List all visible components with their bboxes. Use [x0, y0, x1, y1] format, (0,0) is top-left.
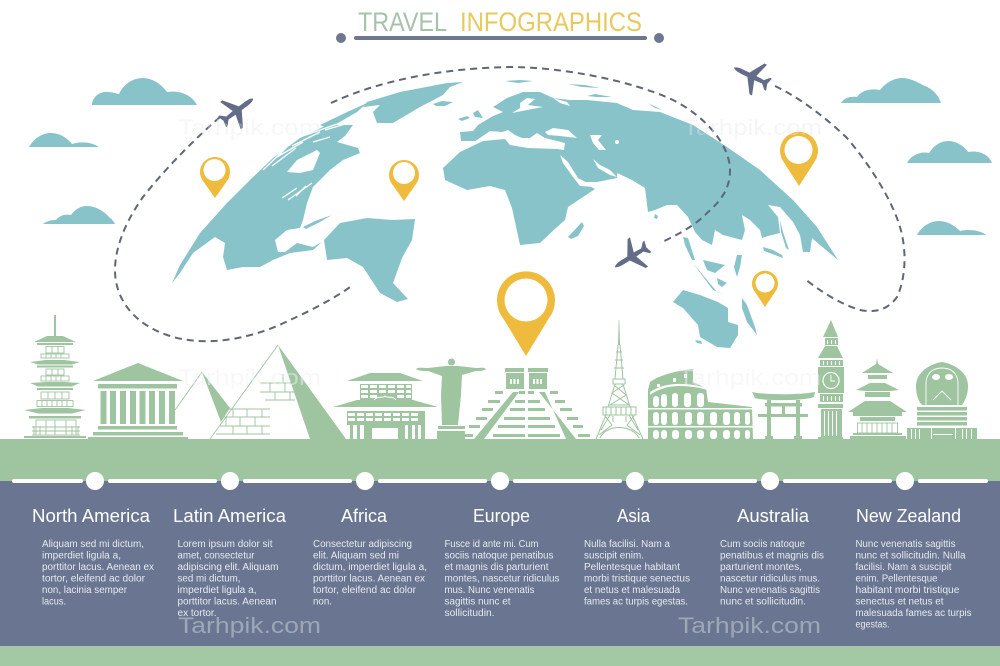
mediterranean	[452, 130, 565, 150]
column: North America	[32, 506, 154, 608]
column: Africa: elit. Aliquam sed mi	[313, 550, 399, 562]
column: Africa: porttitor lacus. Aenean ex	[313, 574, 425, 584]
sea cut-outs	[452, 98, 619, 187]
column: New Zealand: enim. Pellentesque	[856, 574, 938, 584]
column: Africa: Consectetur adipiscing	[313, 539, 412, 550]
watermarks	[178, 115, 822, 638]
column: Europe: Fusce id ante mi. Cum	[444, 539, 538, 550]
column: Europe: mus. Nunc venenatis	[444, 585, 534, 596]
watermarks: Tarhpik.com	[178, 115, 321, 140]
column: Asia: et netus et malesuada	[584, 585, 680, 596]
column: Australia	[720, 506, 824, 608]
baltic sea	[512, 98, 543, 113]
column: Africa: dictum, imperdiet ligula a,	[313, 562, 427, 573]
landmark: asian palace	[333, 373, 438, 439]
column: Latin America	[173, 506, 287, 619]
column: Africa: non.	[313, 596, 332, 608]
japan	[763, 247, 783, 258]
sulawesi	[717, 278, 727, 287]
bottom band	[0, 646, 1000, 666]
column: Australia: Cum sociis natoque	[720, 539, 805, 550]
column: Latin America: ex tortor.	[178, 608, 216, 619]
column: Australia: nunc et sollicitudin.	[720, 596, 806, 608]
title: INFOGRAPHICS	[460, 7, 642, 37]
landmark: mayan pyramid	[464, 368, 590, 439]
column: Asia: suscipit enim.	[584, 550, 644, 562]
column: Europe: sagittis nunc et	[444, 596, 511, 608]
watermarks: Tarhpik.com	[678, 613, 821, 638]
iceland	[433, 101, 453, 106]
column: Latin America: adipiscing elit. Aliquam	[178, 562, 278, 573]
landmark: pagoda	[24, 315, 86, 438]
column: Europe: Europe	[473, 506, 530, 526]
column: Europe: montes, nascetur ridiculus	[444, 574, 560, 584]
caspian sea	[590, 135, 606, 150]
column: Australia: penatibus et magnis dis	[720, 550, 824, 562]
red sea and gulf of aden	[560, 155, 595, 187]
column: New Zealand: senectus et netus et	[856, 596, 944, 608]
column: Latin America: amet, consectetur	[178, 550, 255, 562]
arctic and lake cut-outs	[263, 122, 352, 200]
greenland	[363, 82, 463, 123]
cuba	[303, 215, 332, 229]
column: Latin America: Latin America	[173, 506, 287, 526]
column: Europe	[444, 506, 560, 619]
landmarks skyline	[24, 315, 977, 440]
column: Europe: et magnis dis parturient	[444, 562, 549, 573]
column: Latin America: imperdiet ligula a,	[178, 585, 256, 596]
landmark: big ben	[818, 320, 844, 439]
column: Australia: parturient montes,	[720, 562, 802, 573]
column: Latin America: Lorem ipsum dolor sit	[178, 539, 273, 550]
column: North America: non, lacinia semper	[42, 585, 128, 596]
world map	[172, 80, 838, 348]
canadian arctic islands	[320, 103, 367, 128]
arctic islands	[505, 80, 662, 110]
column: Asia: fames ac turpis egestas.	[584, 596, 688, 608]
pin: north america	[200, 157, 230, 198]
watermarks: Tarhpik.com	[178, 613, 321, 638]
watermarks: Tarhpik.com	[683, 115, 822, 140]
column: New Zealand: nunc et sollicitudin. Nulla	[856, 550, 966, 562]
info panel background	[0, 481, 1000, 646]
white sea	[553, 98, 570, 106]
persian gulf	[593, 159, 617, 177]
column: New Zealand: New Zealand	[856, 506, 961, 526]
column: Asia	[584, 506, 690, 608]
afro-eurasia	[443, 92, 838, 260]
pin: central large	[497, 271, 555, 356]
new guinea	[742, 298, 757, 335]
landmark: pyramids of giza	[175, 345, 346, 439]
java arc	[693, 263, 725, 295]
pin: atlantic	[389, 160, 419, 201]
column: Asia: Pellentesque habitant	[584, 562, 680, 573]
airplane 1	[212, 85, 263, 136]
landmark: torii gate	[752, 392, 815, 439]
watermarks: Tarhpik.com	[178, 365, 321, 390]
ground band	[0, 439, 1000, 481]
flight paths	[115, 67, 905, 341]
column: North America: porttitor lacus. Aenean ex	[42, 562, 154, 573]
airplane 3	[606, 232, 657, 282]
column: Australia: Nunc venenatis sagittis	[720, 585, 820, 596]
column: North America: North America	[32, 506, 151, 526]
map pins	[200, 132, 818, 356]
column: North America: lacus.	[42, 596, 66, 608]
australia	[673, 290, 738, 348]
column: North America: tortor, eleifend ac dolor	[42, 574, 146, 584]
column: North America: imperdiet ligula a,	[42, 550, 121, 562]
column: Africa: tortor, eleifend ac dolor	[313, 585, 417, 596]
borneo	[703, 260, 725, 273]
landmark: sphinx	[907, 362, 977, 439]
north america	[172, 125, 360, 283]
title: TRAVEL	[358, 7, 447, 37]
timeline	[12, 472, 988, 490]
pin: pacific	[752, 271, 778, 307]
column: New Zealand: malesuada fames ac turpis	[856, 608, 972, 619]
landmark: christ the redeemer	[416, 358, 486, 439]
column: Africa: Africa	[341, 506, 388, 526]
column: North America: Aliquam sed mi dictum,	[42, 539, 144, 550]
aral sea	[615, 140, 619, 144]
column: Latin America: sed mi dictum,	[178, 574, 240, 584]
sri lanka	[654, 214, 658, 219]
kuril strip	[780, 220, 789, 250]
tasmania	[695, 340, 702, 344]
column: New Zealand: facilisi. Nam a suscipit	[856, 562, 952, 573]
airplane 2	[726, 52, 776, 100]
column: Asia: Nulla facilisi. Nam a	[584, 539, 670, 550]
watermarks: Tarhpik.com	[678, 365, 821, 390]
column: Europe: sociis natoque penatibus	[444, 550, 554, 562]
column: Europe: sollicitudin.	[444, 608, 494, 619]
clouds	[29, 78, 992, 235]
hudson bay	[287, 150, 320, 173]
madagascar	[568, 222, 584, 239]
south america	[324, 218, 415, 302]
column: New Zealand: Nunc venenatis sagittis	[856, 539, 956, 550]
column: Asia: Asia	[617, 506, 651, 526]
column: Australia: nascetur ridiculus mus.	[720, 574, 820, 584]
philippines	[734, 255, 742, 277]
column: Africa	[313, 506, 427, 608]
landmark: greek temple	[88, 363, 188, 440]
landmark: colosseum	[648, 369, 753, 439]
column: New Zealand: egestas.	[856, 620, 890, 630]
landmark: eiffel tower	[596, 320, 643, 439]
malay peninsula and sumatra	[683, 237, 695, 260]
column: New Zealand: habitant morbi tristique	[856, 585, 960, 596]
title	[336, 7, 664, 43]
british isles	[458, 110, 483, 121]
black sea	[545, 128, 577, 138]
column: Asia: morbi tristique senectus	[584, 574, 690, 584]
column: Latin America: porttitor lacus. Aenean	[178, 596, 276, 608]
landmark: temple pagoda	[848, 358, 907, 439]
pin: asia	[780, 132, 818, 186]
column: New Zealand	[856, 506, 972, 630]
column: Australia: Australia	[737, 506, 810, 526]
